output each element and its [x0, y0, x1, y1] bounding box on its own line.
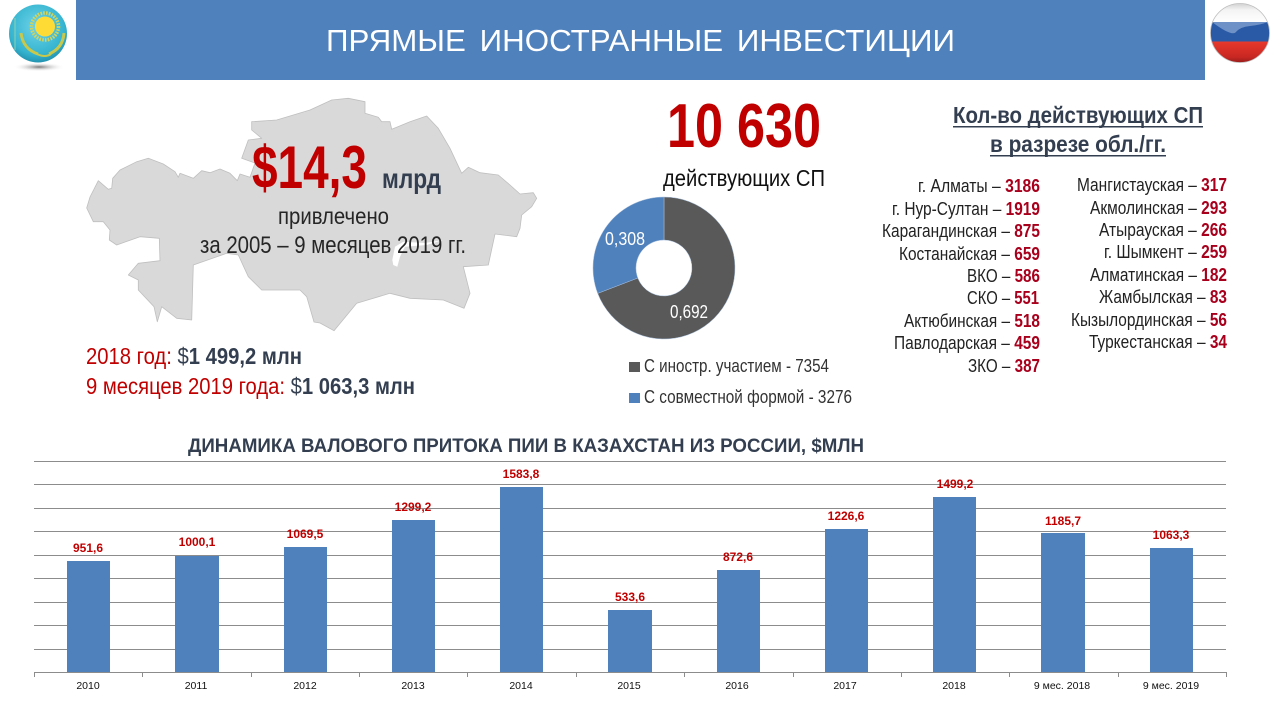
category labels — [76, 680, 1199, 692]
category labels: 2012 — [293, 680, 317, 692]
category labels: 9 мес. 2018 — [1034, 680, 1090, 692]
caption line 2: за 2005 – 9 месяцев 2019 гг. — [200, 232, 466, 259]
donut chart: 0,308 — [605, 229, 645, 249]
region list column 1: Карагандинская – 875 — [882, 221, 1040, 241]
region list column 2: Жамбылская – 83 — [1099, 287, 1227, 307]
panel: joint ventures total — [593, 92, 852, 407]
bar chart — [34, 462, 1226, 692]
value labels — [73, 467, 1190, 604]
icon: Kazakhstan flag sphere — [9, 4, 67, 72]
category labels: 2016 — [725, 680, 749, 692]
region list column 2: Алматинская – 182 — [1090, 265, 1227, 285]
heading: в разрезе обл./гг. — [990, 131, 1166, 157]
2019 figure: 9 месяцев 2019 года: $1 063,3 млн — [86, 373, 415, 399]
region list column 2: Акмолинская – 293 — [1090, 198, 1227, 218]
category labels: 2014 — [509, 680, 533, 692]
map of Kazakhstan — [87, 98, 537, 331]
value labels: 1000,1 — [179, 535, 216, 549]
category labels: 2013 — [401, 680, 425, 692]
category labels: 2017 — [833, 680, 857, 692]
region list column 2: Кызылординская – 56 — [1071, 310, 1227, 330]
value labels: 951,6 — [73, 541, 103, 555]
caption line 1: привлечено — [278, 203, 389, 229]
value labels: 1185,7 — [1045, 514, 1081, 528]
region list column 2: Мангистауская – 317 — [1077, 175, 1227, 195]
category labels: 2018 — [942, 680, 966, 692]
region list column 2: Атырауская – 266 — [1099, 220, 1227, 240]
region list column 1: Павлодарская – 459 — [894, 333, 1040, 353]
value labels: 1499,2 — [937, 477, 974, 491]
region list column 2: г. Шымкент – 259 — [1104, 242, 1227, 262]
value labels: 1069,5 — [287, 527, 324, 541]
category labels: 2011 — [185, 680, 207, 692]
region list column 2 — [1071, 175, 1227, 352]
icon: Russia flag sphere — [1210, 3, 1270, 64]
region list column 1: ЗКО – 387 — [968, 356, 1040, 376]
bars — [67, 487, 1193, 672]
region list column 1 — [882, 176, 1040, 376]
region list column 1: ВКО – 586 — [967, 266, 1040, 286]
header banner — [76, 0, 1205, 80]
unit: млрд — [382, 163, 441, 194]
category labels: 2010 — [76, 680, 100, 692]
chart title: ДИНАМИКА ВАЛОВОГО ПРИТОКА ПИИ В КАЗАХСТАН ИЗ РОССИИ, $МЛН — [188, 436, 864, 457]
region list column 1: г. Алматы – 3186 — [918, 176, 1040, 196]
category labels: 9 мес. 2019 — [1143, 680, 1199, 692]
panel: joint ventures by region — [882, 102, 1227, 376]
region list column 1: Актюбинская – 518 — [904, 311, 1040, 331]
heading: Кол-во действующих СП — [953, 102, 1203, 128]
value labels: 1583,8 — [503, 467, 540, 481]
legend — [629, 356, 852, 407]
region list column 1: г. Нур-Султан – 1919 — [892, 199, 1040, 219]
region list column 2: Туркестанская – 34 — [1089, 332, 1227, 352]
value labels: 1226,6 — [828, 509, 865, 523]
value labels: 533,6 — [615, 590, 645, 604]
big figure: $14,3 — [252, 134, 367, 201]
panel: total investment map — [87, 98, 537, 331]
value labels: 872,6 — [723, 550, 753, 564]
title: ПРЯМЫЕ ИНОСТРАННЫЕ ИНВЕСТИЦИИ — [326, 24, 955, 58]
caption: действующих СП — [663, 165, 825, 191]
donut chart: 0,692 — [670, 302, 708, 322]
value labels: 1299,2 — [395, 500, 432, 514]
2018 figure: 2018 год: $1 499,2 млн — [86, 343, 302, 369]
region list column 1: СКО – 551 — [967, 288, 1039, 308]
donut chart — [593, 197, 735, 339]
legend: С совместной формой - 3276 — [644, 387, 852, 407]
legend: С иностр. участием - 7354 — [644, 356, 829, 376]
text block: yearly figures — [86, 343, 415, 399]
value labels: 1063,3 — [1153, 528, 1190, 542]
category labels: 2015 — [617, 680, 641, 692]
heading — [953, 102, 1203, 157]
region list column 1: Костанайская – 659 — [899, 244, 1040, 264]
big number: 10 630 — [667, 92, 821, 161]
